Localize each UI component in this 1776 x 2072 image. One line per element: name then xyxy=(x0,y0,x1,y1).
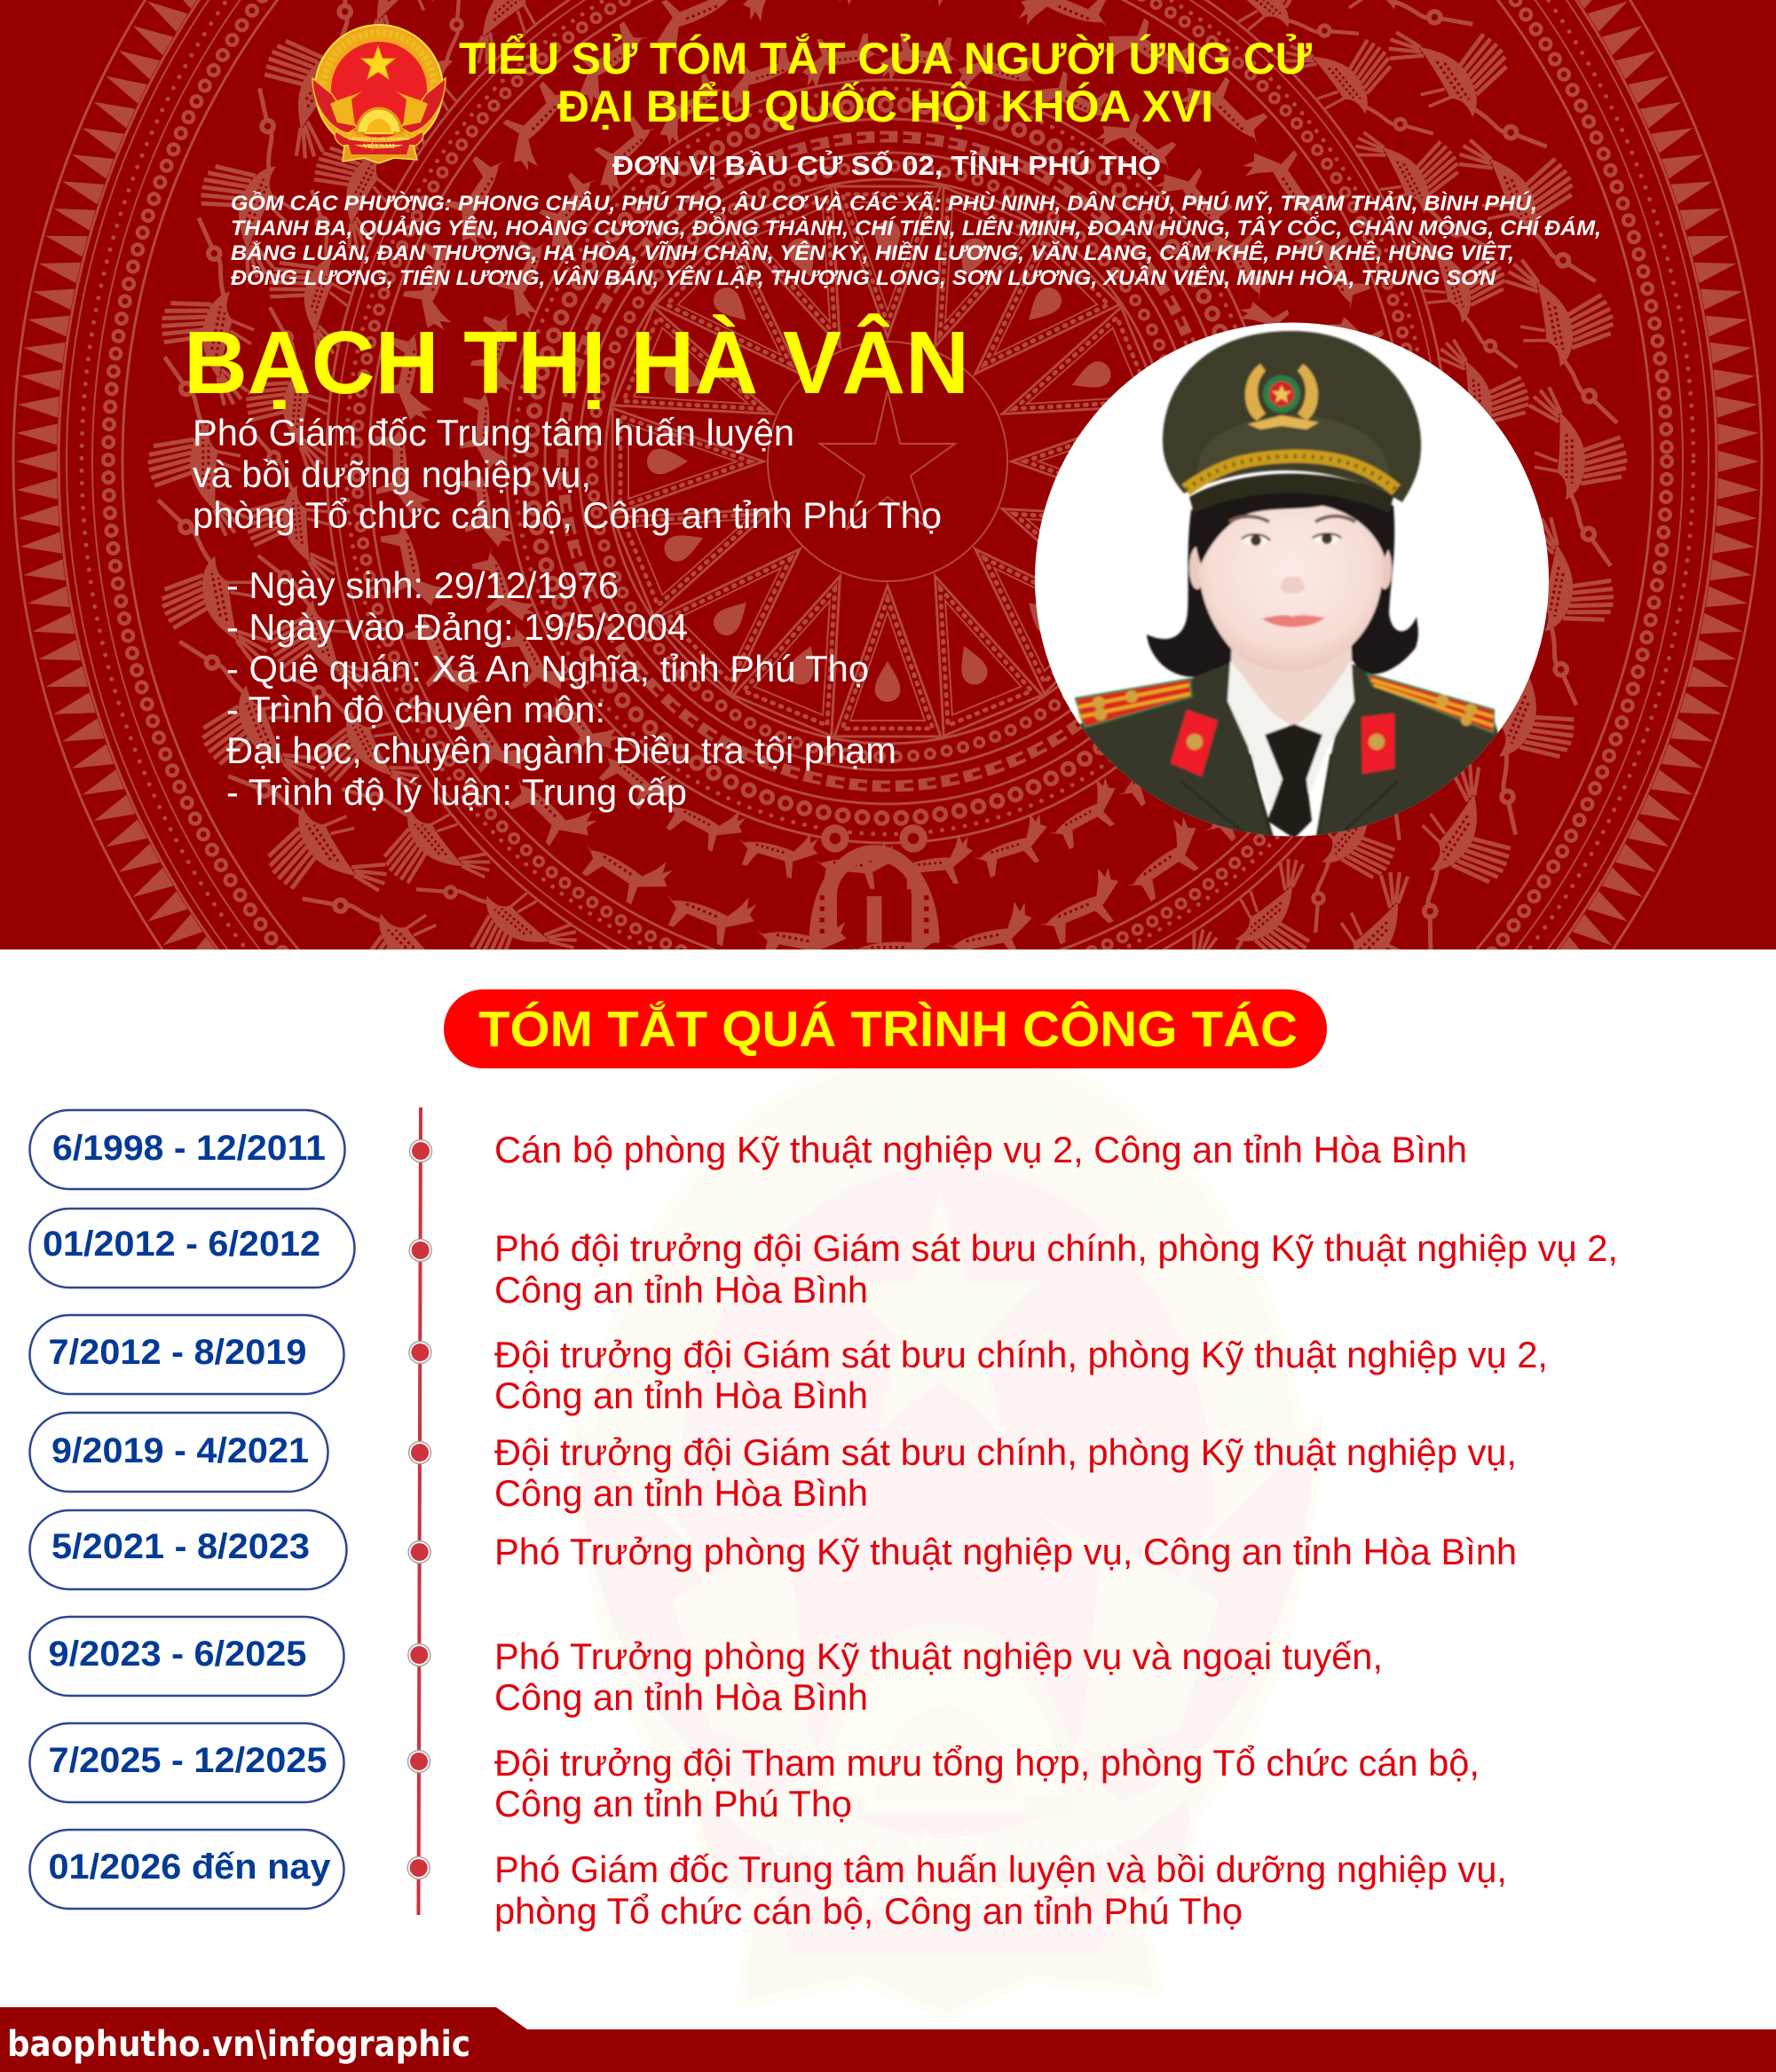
portrait: ears xyxy=(1189,547,1392,589)
role text 8 xyxy=(494,1848,1507,1932)
timeline dot 1 xyxy=(410,1139,431,1162)
timeline dot 3 xyxy=(409,1342,431,1363)
date pill 6: 9/2023 - 6/2025 xyxy=(48,1635,307,1674)
date pill 4: 9/2019 - 4/2021 xyxy=(51,1431,309,1470)
timeline dot 4 xyxy=(408,1441,431,1464)
footer bar: baophutho.vn\infographic xyxy=(7,2024,470,2065)
portrait: fringe xyxy=(1194,492,1391,564)
role text 5: Phó Trưởng phòng Kỹ thuật nghiệp vụ, Công an tỉnh Hòa Bình xyxy=(494,1531,1517,1572)
portrait: cap visor xyxy=(1189,474,1393,513)
role text 2: Công an tỉnh Hòa Bình xyxy=(494,1269,868,1311)
text block: position xyxy=(193,412,942,536)
date pill 1 xyxy=(30,1110,344,1189)
role text 4: Đội trưởng đội Giám sát bưu chính, phòng Kỹ thuật nghiệp vụ, xyxy=(494,1431,1517,1473)
portrait: eyebrows xyxy=(1229,516,1355,522)
date pill 5: 5/2021 - 8/2023 xyxy=(51,1527,310,1566)
text block: personal details xyxy=(226,564,896,813)
text block: wards and communes xyxy=(231,191,1601,290)
portrait: eyes xyxy=(1242,533,1341,546)
portrait: hair xyxy=(1147,483,1418,678)
text block: personal details: - Ngày sinh: 29/12/1976 xyxy=(226,564,619,606)
title xyxy=(459,33,1313,131)
timeline entry 2 xyxy=(30,1209,1618,1311)
role text 2 xyxy=(494,1227,1618,1311)
heading pill: career summary: TÓM TẮT QUÁ TRÌNH CÔNG TÁC xyxy=(478,1000,1298,1058)
timeline dot 2 xyxy=(409,1239,431,1262)
date pill 2: 01/2012 - 6/2012 xyxy=(43,1225,320,1264)
date pill 3: 7/2012 - 8/2019 xyxy=(48,1333,307,1372)
text block: wards and communes: ĐỒNG LƯƠNG, TIÊN LƯƠNG, VÂN BÁN, YÊN LẬP, THƯỢNG LONG, SƠN LƯƠNG, XUÂN VIÊN, MINH HÒA, TRUNG SƠN xyxy=(231,265,1496,290)
role text 6 xyxy=(494,1635,1383,1718)
text block: wards and communes: THANH BA, QUẢNG YÊN, HOÀNG CƯƠNG, ĐỒNG THÀNH, CHÍ TIÊN, LIÊN MINH, ĐOAN HÙNG, TÂY CỐC, CHÂN MỘNG, CHÍ ĐÁM, xyxy=(231,216,1601,240)
portrait: left collar tab xyxy=(1171,710,1218,776)
role text 1: Cán bộ phòng Kỹ thuật nghiệp vụ 2, Công an tỉnh Hòa Bình xyxy=(494,1129,1467,1170)
date pill 1: 6/1998 - 12/2011 xyxy=(52,1129,326,1168)
role text 2: Phó đội trưởng đội Giám sát bưu chính, phòng Kỹ thuật nghiệp vụ 2, xyxy=(494,1227,1618,1269)
timeline entry 6 xyxy=(30,1617,1383,1718)
timeline entry 3 xyxy=(30,1315,1548,1416)
text block: position: và bồi dưỡng nghiệp vụ, xyxy=(193,453,591,495)
date pill 7: 7/2025 - 12/2025 xyxy=(48,1741,328,1780)
date pill 5 xyxy=(30,1510,346,1589)
portrait: collar pins xyxy=(1187,734,1385,750)
role text 7: Công an tỉnh Phú Thọ xyxy=(494,1783,852,1824)
date pill 4 xyxy=(30,1413,328,1492)
timeline dot 6 xyxy=(408,1643,430,1666)
text block: wards and communes: BẰNG LUÂN, ĐAN THƯỢNG, HẠ HÒA, VĨNH CHÂN, YÊN KỲ, HIỀN LƯƠNG, VĂN LANG, CẨM KHÊ, PHÚ KHÊ, HÙNG VIỆT, xyxy=(231,240,1514,265)
portrait: lapels xyxy=(1180,754,1398,843)
portrait: cap band xyxy=(1198,414,1388,474)
text block: personal details: - Quê quán: Xã An Nghĩa, tỉnh Phú Thọ xyxy=(226,648,869,689)
footer bar xyxy=(0,2007,1776,2072)
text block: position: Phó Giám đốc Trung tâm huấn luyện xyxy=(193,412,794,453)
timeline entry 7 xyxy=(30,1723,1480,1824)
heading: candidate name: BẠCH THỊ HÀ VÂN xyxy=(184,312,969,413)
role text 4: Công an tỉnh Hòa Bình xyxy=(494,1472,868,1514)
role text 6: Công an tỉnh Hòa Bình xyxy=(494,1676,868,1718)
portrait: uniform jacket xyxy=(1038,663,1535,852)
timeline entry 1 xyxy=(30,1110,1467,1189)
timeline axis xyxy=(419,1107,421,1915)
text block: personal details: - Trình độ chuyên môn: xyxy=(226,689,605,730)
timeline dot 5 xyxy=(408,1540,430,1564)
panel: red header with bronze drum pattern xyxy=(0,0,1776,949)
portrait: gold cord xyxy=(1186,456,1396,490)
timeline entry 5 xyxy=(30,1510,1517,1589)
portrait: shirt collar xyxy=(1227,661,1354,821)
portrait: neck xyxy=(1230,634,1353,728)
role text 3: Công an tỉnh Hòa Bình xyxy=(494,1375,868,1416)
timeline entry 8 xyxy=(30,1830,1507,1932)
text block: personal details: - Trình độ lý luận: Trung cấp xyxy=(226,771,687,813)
role text 7: Đội trưởng đội Tham mưu tổng hợp, phòng Tổ chức cán bộ, xyxy=(494,1742,1480,1784)
portrait: nose xyxy=(1281,577,1305,594)
portrait: right collar tab xyxy=(1362,713,1394,774)
icon: national emblem xyxy=(312,25,446,163)
date pill 7 xyxy=(30,1723,344,1802)
text block: personal details: Đại học, chuyên ngành Điều tra tội phạm xyxy=(226,729,896,771)
portrait: right epaulette xyxy=(1367,674,1494,733)
date pill 8 xyxy=(30,1830,344,1909)
timeline dot 7 xyxy=(408,1750,430,1773)
portrait: cap badge xyxy=(1245,364,1319,429)
role text 7 xyxy=(494,1742,1480,1824)
portrait: face xyxy=(1198,497,1383,672)
timeline entry 4 xyxy=(30,1413,1517,1514)
role text 3 xyxy=(494,1334,1548,1416)
watermark: pale national emblem behind timeline xyxy=(572,1048,1318,2017)
portrait: left epaulette stripes and stars xyxy=(1077,685,1190,721)
date pill 6 xyxy=(30,1617,344,1696)
portrait: cap crown xyxy=(1163,331,1421,502)
text block: wards and communes: GỒM CÁC PHƯỜNG: PHONG CHÂU, PHÚ THỌ, ÂU CƠ VÀ CÁC XÃ: PHÙ NINH, DÂN CHỦ, PHÚ MỸ, TRẠM THẢN, BÌNH PHÚ, xyxy=(231,191,1537,216)
role text 8: phòng Tổ chức cán bộ, Công an tỉnh Phú Thọ xyxy=(494,1890,1243,1932)
portrait: tie xyxy=(1265,724,1322,839)
role text 8: Phó Giám đốc Trung tâm huấn luyện và bồi dưỡng nghiệp vụ, xyxy=(494,1848,1507,1890)
title: TIỂU SỬ TÓM TẮT CỦA NGƯỜI ỨNG CỬ xyxy=(459,33,1313,83)
text block: personal details: - Ngày vào Đảng: 19/5/2004 xyxy=(226,606,688,648)
role text 3: Đội trưởng đội Giám sát bưu chính, phòng Kỹ thuật nghiệp vụ 2, xyxy=(494,1334,1548,1375)
text block: position: phòng Tổ chức cán bộ, Công an tỉnh Phú Thọ xyxy=(193,494,942,536)
portrait: lips xyxy=(1262,615,1325,627)
portrait: right epaulette stripes and stars xyxy=(1371,680,1494,726)
date pill 3 xyxy=(30,1315,344,1394)
subheading: electoral unit: ĐƠN VỊ BẦU CỬ SỐ 02, TỈNH PHÚ THỌ xyxy=(612,149,1161,181)
role text 4 xyxy=(494,1431,1517,1514)
date pill 2 xyxy=(30,1209,355,1288)
portrait: left epaulette xyxy=(1076,679,1192,728)
date pill 8: 01/2026 đến nay xyxy=(48,1847,331,1887)
portrait: cord texture xyxy=(1186,456,1396,490)
heading pill: career summary xyxy=(444,989,1327,1068)
timeline dot 8 xyxy=(407,1856,430,1879)
portrait: candidate in uniform inside white circle xyxy=(1035,323,1549,852)
role text 6: Phó Trưởng phòng Kỹ thuật nghiệp vụ và ngoại tuyến, xyxy=(494,1635,1383,1677)
title: ĐẠI BIỂU QUỐC HỘI KHÓA XVI xyxy=(557,81,1213,131)
